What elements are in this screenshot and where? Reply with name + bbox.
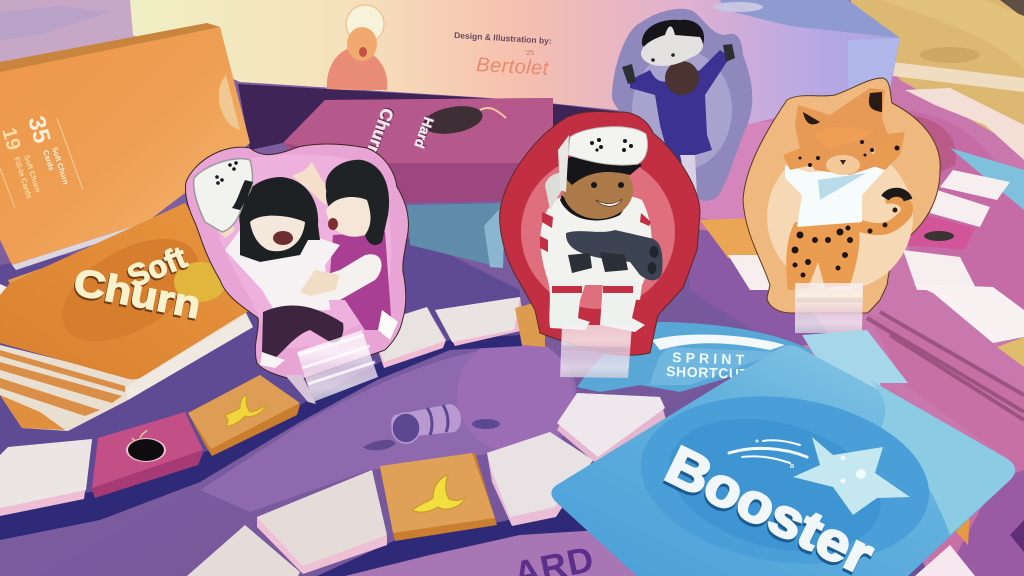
standee: astronaut bbox=[500, 112, 700, 355]
card emblem ring bbox=[630, 379, 940, 576]
right woman bbox=[292, 160, 398, 340]
board tiles: white upper row bbox=[370, 297, 545, 368]
plastic stand: astronaut bbox=[560, 325, 632, 378]
banner text bbox=[666, 349, 749, 382]
card count labels: Soft Churn bbox=[22, 154, 43, 194]
right board section bbox=[690, 0, 1024, 576]
standee: cheetah bbox=[743, 78, 940, 313]
astronaut face bbox=[560, 153, 642, 220]
cheetah tail bbox=[858, 192, 908, 234]
lid credit text: '25 bbox=[525, 50, 534, 57]
cheetah shirt bbox=[785, 160, 885, 227]
board tile: banana one bbox=[188, 375, 300, 456]
small white tile at left bbox=[0, 284, 18, 305]
standee: two arguing women bbox=[185, 144, 408, 380]
card count labels: Fill-In Cards bbox=[12, 156, 34, 200]
card star bbox=[793, 437, 910, 515]
lid credit text bbox=[454, 30, 552, 80]
standee: VR figure in purple bbox=[612, 9, 752, 201]
cheetah head bbox=[795, 88, 900, 175]
plastic stand: women bbox=[285, 330, 378, 404]
cheetah arms bbox=[783, 132, 905, 170]
icon: banana bbox=[224, 395, 267, 426]
icon: bomb bbox=[126, 430, 166, 462]
hard churn title bbox=[362, 106, 437, 159]
lid illustration: elderly figure bbox=[327, 5, 387, 90]
soft churn title bbox=[70, 239, 204, 327]
board tile: white bottom one bbox=[257, 470, 387, 574]
plastic stand: cheetah bbox=[795, 283, 863, 333]
soft churn card deck bbox=[0, 203, 253, 431]
hard churn box bbox=[283, 98, 553, 203]
card swoosh lines bbox=[729, 440, 807, 468]
board tile: white left bbox=[0, 439, 92, 516]
cheetah legs bbox=[786, 222, 860, 290]
game box lid bbox=[130, 0, 900, 124]
soft churn lemon emblem bbox=[174, 262, 226, 302]
small banana tile behind deck bbox=[8, 262, 90, 295]
booster card bbox=[551, 346, 1015, 576]
booster title: Booster bbox=[657, 435, 883, 576]
board tile: white lower right bbox=[557, 393, 666, 465]
cheetah scarf bbox=[818, 173, 866, 200]
hard churn bomb icon bbox=[421, 102, 506, 138]
astronaut blaster bbox=[566, 230, 662, 280]
card count labels: Soft Churn bbox=[50, 146, 71, 186]
hard churn title: Churn bbox=[362, 106, 397, 159]
figure headset bbox=[641, 26, 703, 66]
sprint shortcut banner bbox=[577, 322, 815, 392]
board track bbox=[0, 335, 650, 576]
board tile: white centre right bbox=[487, 432, 593, 526]
lid credit text: Bertolet bbox=[476, 54, 550, 80]
figure body bbox=[630, 50, 730, 165]
hard churn title: Hard bbox=[411, 115, 437, 150]
icon: banana bbox=[412, 475, 466, 512]
board tile: banana two bbox=[380, 453, 497, 541]
soft churn card box bbox=[0, 23, 250, 270]
blue box bbox=[407, 203, 505, 268]
banner text: SPRINT bbox=[672, 349, 745, 368]
board tile: bomb bbox=[92, 412, 203, 498]
astronaut suit bbox=[540, 173, 652, 332]
astronaut headset bbox=[558, 127, 647, 192]
soft churn title: Churn bbox=[70, 262, 204, 327]
shadow under lid bbox=[238, 84, 620, 200]
soft churn title: Soft bbox=[123, 239, 191, 294]
reflection of stand bbox=[802, 330, 908, 420]
banner text: SHORTCUT bbox=[666, 363, 749, 382]
card count labels bbox=[0, 113, 71, 200]
card count labels: Cards bbox=[41, 149, 56, 172]
VR headset held bbox=[194, 159, 253, 232]
board tile: white bottom two bbox=[187, 525, 300, 576]
card count labels: 35 bbox=[22, 113, 56, 146]
spilled can illustration bbox=[363, 404, 500, 450]
left woman bbox=[210, 177, 343, 368]
lid credit text: Design & Illustration by: bbox=[454, 30, 552, 46]
